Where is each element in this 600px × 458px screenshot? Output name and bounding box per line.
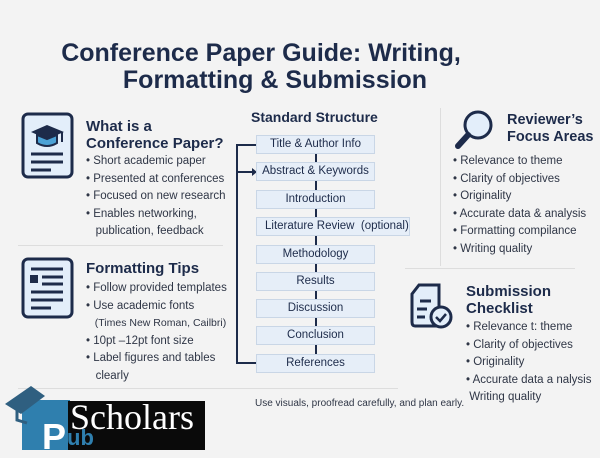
heading: submission checklist: Submission <box>466 283 551 300</box>
list: what is: publication, feedback <box>96 225 204 237</box>
text: Discussion <box>288 302 343 314</box>
list: what is: • Enables networking, <box>86 208 197 220</box>
title: Conference Paper Guide: Writing, <box>61 39 461 67</box>
heading: what is <box>86 118 224 152</box>
icon: paper with cap <box>22 112 74 178</box>
list: formatting: (Times New Roman, Cailbri) <box>95 317 226 329</box>
text: Conclusion <box>287 329 344 341</box>
heading: reviewer <box>507 112 594 145</box>
icon: document <box>22 258 74 318</box>
list: checklist <box>466 321 592 403</box>
icon: checklist <box>410 284 452 328</box>
list: formatting: • Label figures and tables <box>86 352 215 364</box>
heading: submission checklist: Checklist <box>466 300 533 317</box>
list: reviewer: • Clarity of objectives <box>453 172 560 184</box>
logo: ub <box>67 425 94 450</box>
logo: Scholars <box>70 397 194 437</box>
logo <box>5 386 205 457</box>
list: formatting: • Use academic fonts <box>86 300 194 312</box>
list: reviewer: • Accurate data & analysis <box>453 208 586 220</box>
text: Literature Review (optional) <box>265 220 409 232</box>
text: Title & Author Info <box>270 138 361 150</box>
title: Formatting & Submission <box>123 66 427 94</box>
text: Abstract & Keywords <box>262 165 369 177</box>
heading: what is: What is a <box>86 118 152 135</box>
list: reviewer: • Formatting compilance <box>453 225 577 237</box>
list: formatting: • Follow provided templates <box>86 282 227 294</box>
logo: P <box>42 416 66 457</box>
heading: reviewer: Focus Areas <box>507 129 594 145</box>
title <box>61 39 461 94</box>
text: Introduction <box>285 193 346 205</box>
list: formatting <box>86 282 227 382</box>
bracket arrow <box>236 144 256 364</box>
list: formatting: clearly <box>96 370 129 382</box>
connector line <box>315 150 317 360</box>
list: what is: • Focused on new research <box>86 190 226 202</box>
heading: reviewer: Reviewer’s <box>507 112 583 128</box>
text: References <box>286 357 345 369</box>
footer note: Use visuals, proofread carefully, and plan early. <box>255 398 464 409</box>
text: Results <box>296 275 335 287</box>
list: formatting: • 10pt –12pt font size <box>86 334 194 346</box>
icon: magnifier <box>455 110 492 149</box>
list: reviewer: • Writing quality <box>453 242 532 254</box>
list: checklist: • Relevance t: theme <box>466 321 572 333</box>
list: what is <box>86 155 226 237</box>
list: reviewer: • Originality <box>453 190 511 202</box>
heading: submission checklist <box>466 283 551 317</box>
list: checklist: • Accurate data a nalysis <box>466 374 591 386</box>
heading: formatting tips: Formatting Tips <box>86 260 199 277</box>
text: Methodology <box>283 248 348 260</box>
list: what is: • Presented at conferences <box>86 172 224 184</box>
list: checklist: • Originality <box>466 356 524 368</box>
list: reviewer: • Relevance to theme <box>453 155 563 167</box>
heading: what is: Conference Paper? <box>86 135 224 152</box>
structure boxes <box>256 135 410 373</box>
list: what is: • Short academic paper <box>86 155 206 167</box>
list: checklist: • Clarity of objectives <box>466 338 573 350</box>
list: checklist: Writing quality <box>469 391 541 403</box>
heading: standard structure: Standard Structure <box>251 109 378 125</box>
list: reviewer <box>453 155 586 254</box>
